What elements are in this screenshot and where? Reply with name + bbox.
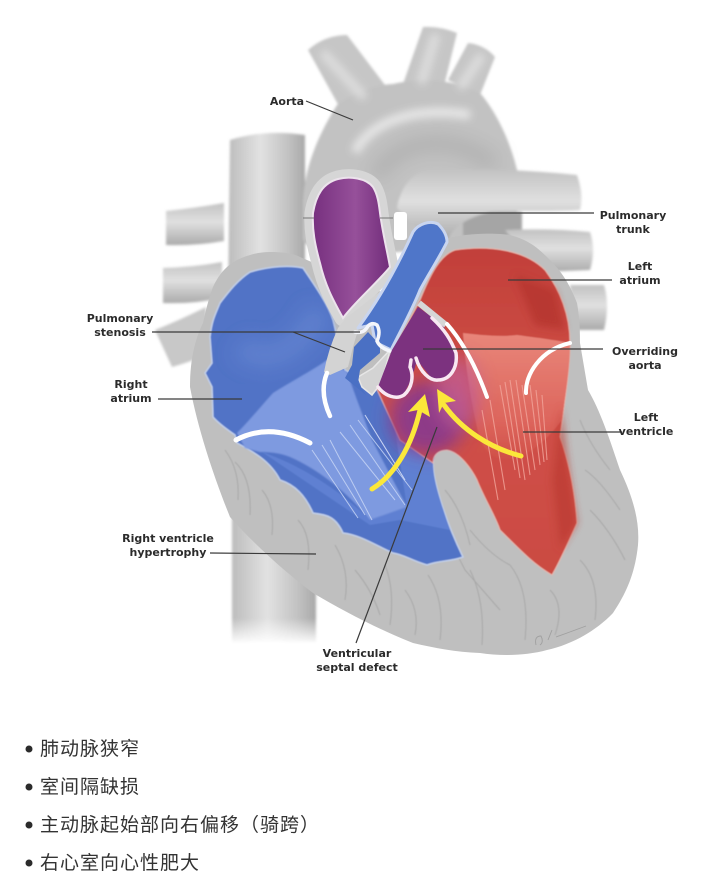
left pulmonary artery stubs — [463, 212, 607, 330]
white valve leaflets — [236, 324, 570, 443]
label: Aorta: Aorta — [270, 95, 304, 108]
label: Overriding aorta: aorta — [628, 359, 662, 372]
aortic valve cusps — [378, 318, 456, 397]
heart wall — [190, 234, 638, 655]
label: Left ventricle: ventricle — [619, 425, 673, 438]
branch 3 — [448, 43, 495, 95]
label: Right atrium: atrium — [110, 392, 152, 405]
chambers — [205, 248, 577, 575]
bullet: ventricular septal defect: 室间隔缺损 — [40, 776, 140, 798]
label: Ventricular septal defect: septal defect — [316, 661, 398, 674]
label: Pulmonary stenosis: stenosis — [94, 326, 146, 339]
overriding aorta lower lumen — [378, 303, 457, 397]
stenotic valve squiggle — [355, 324, 390, 351]
bullet: right ventricular hypertrophy: 右心室向心性肥大 — [40, 852, 200, 874]
right pulmonary vein stubs — [155, 203, 224, 367]
label: Left ventricle: Left — [634, 411, 658, 424]
left ventricle outflow salmon — [463, 333, 570, 459]
aorta ascending wall and lumen — [303, 178, 393, 318]
chordae tendineae — [312, 415, 412, 520]
branch 1 — [308, 35, 385, 108]
branch highlights — [325, 38, 480, 95]
branch 2 — [403, 27, 457, 84]
arch — [303, 80, 517, 260]
left atrium dark patch — [515, 275, 565, 330]
label: Overriding aorta: Overriding — [612, 345, 678, 358]
aortic wall ticks — [303, 217, 393, 219]
gap beside aorta — [394, 212, 407, 240]
label: Pulmonary trunk: trunk — [616, 223, 651, 236]
arrow: right yellow shunt — [437, 389, 521, 456]
aortic root grey wall — [419, 303, 446, 325]
right atrium and right ventricle — [205, 266, 463, 565]
right ventricular outflow tract — [358, 222, 447, 350]
label: Right ventricle hypertrophy: hypertrophy — [130, 546, 206, 559]
muscle fold lines in wall — [225, 420, 625, 645]
blue below stenosis — [345, 332, 380, 395]
conal septum and stenosis muscle — [324, 290, 392, 395]
bullet list — [26, 738, 320, 874]
vessels behind the heart — [155, 27, 607, 644]
bullet: pulmonary stenosis: 肺动脉狭窄 — [40, 738, 140, 760]
label: Right ventricle hypertrophy: Right ventricle — [122, 532, 214, 545]
arch inner shade — [375, 143, 495, 178]
label: Pulmonary trunk: Pulmonary — [600, 209, 666, 222]
arch highlight — [355, 112, 470, 152]
medium blue lower right ventricle — [262, 430, 450, 530]
label: Ventricular septal defect: Ventricular — [323, 647, 391, 660]
leader lines — [152, 101, 622, 643]
left atrium and left ventricle — [375, 248, 577, 575]
label: Right atrium: Right — [114, 378, 148, 391]
pulmonary trunk vessel — [397, 169, 581, 240]
superior vena cava — [228, 133, 305, 300]
arrow: left yellow shunt — [372, 394, 430, 489]
aortic branches and arch — [303, 27, 517, 260]
label: Left atrium: atrium — [619, 274, 661, 287]
label: Pulmonary stenosis: Pulmonary — [87, 312, 153, 325]
mixed blood blur — [390, 382, 466, 454]
tricuspid lighter blue region — [237, 360, 407, 520]
right atrium highlight — [240, 310, 320, 356]
inferior vena cava — [228, 500, 320, 644]
dark red wall shading — [552, 405, 577, 550]
label: Left atrium: Left — [628, 260, 652, 273]
bullet: overriding aorta: 主动脉起始部向右偏移（骑跨） — [40, 814, 320, 836]
signature scribble — [536, 626, 586, 645]
